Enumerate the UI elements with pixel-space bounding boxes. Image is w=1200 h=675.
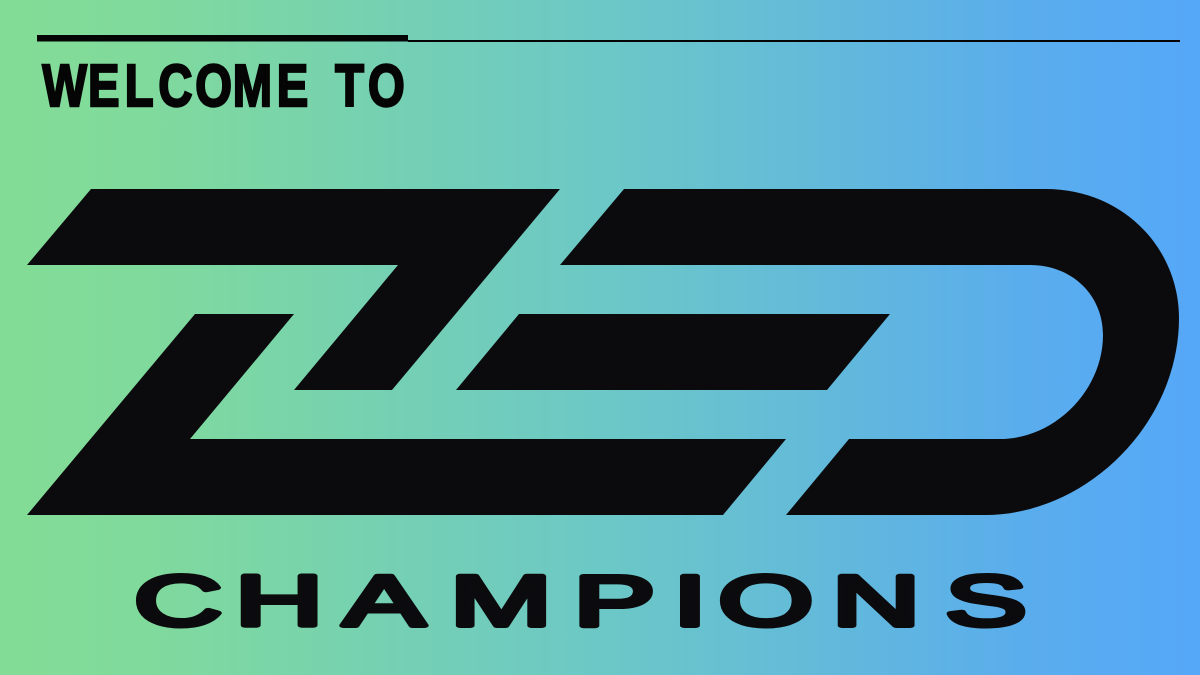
header rule: [37, 35, 1180, 42]
logo part: Z upper stroke: [27, 189, 560, 390]
wordmark: champions: CHAMPIONS: [134, 562, 1027, 641]
logo part: Z lower stroke: [27, 314, 786, 515]
logo part: E middle bar: [456, 314, 890, 390]
logo: ZED emblem: [27, 189, 1179, 515]
logo part: D bowl: [560, 189, 1179, 515]
heading: welcome to: WELCOME TO: [42, 54, 405, 119]
